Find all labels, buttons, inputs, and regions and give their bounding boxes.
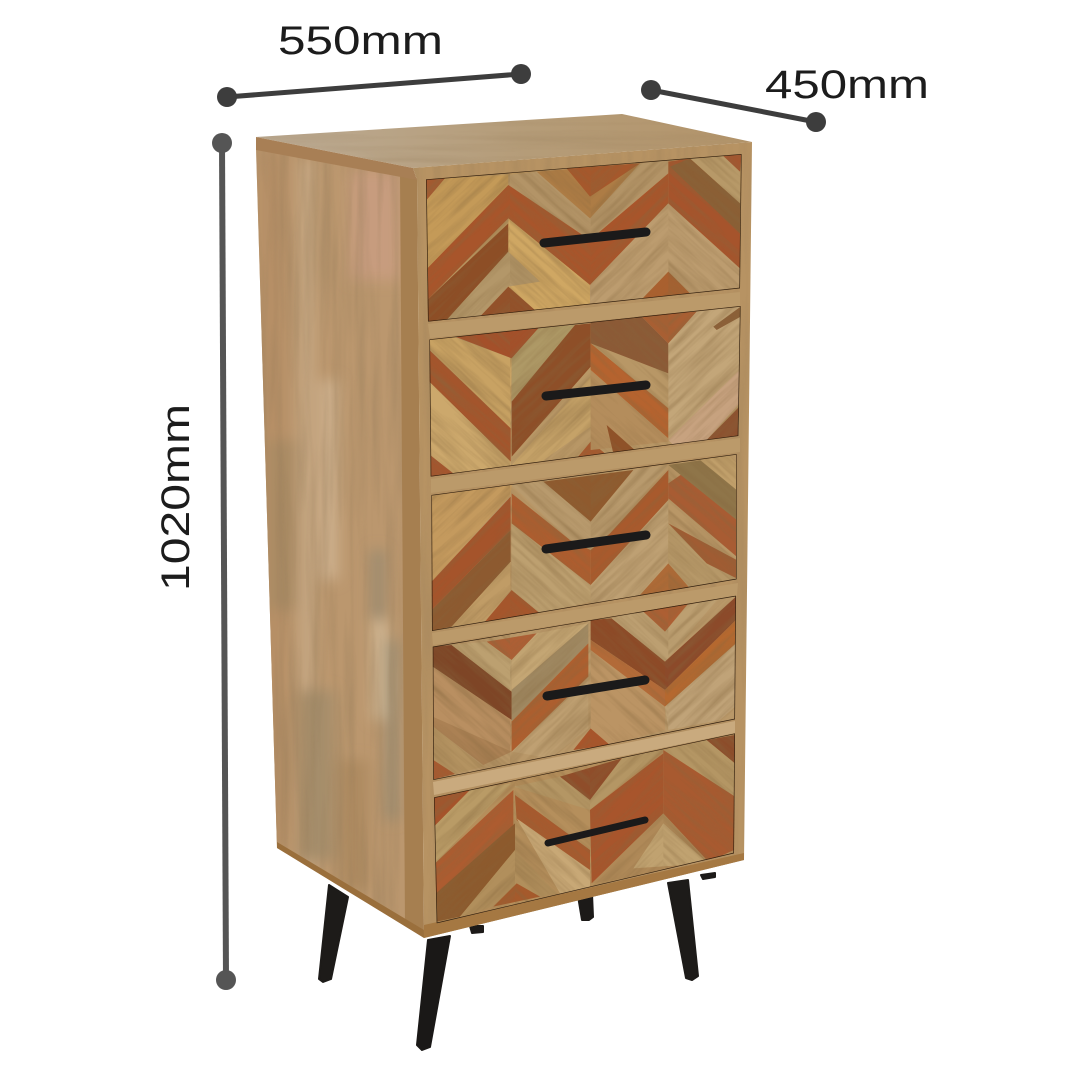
drawer 1 wood grain bbox=[427, 156, 740, 318]
back leg and far feet bbox=[470, 873, 715, 933]
drawer 4 bbox=[432, 596, 736, 780]
handle 3 bbox=[546, 535, 646, 549]
top surface bbox=[256, 114, 752, 168]
width label: 550mm bbox=[278, 19, 443, 63]
top edge band on side bbox=[256, 137, 417, 180]
drawer handles bbox=[544, 232, 646, 843]
infographic canvas bbox=[161, 26, 926, 1051]
depth dimension arrow bbox=[641, 80, 826, 132]
height label: 1020mm bbox=[154, 404, 198, 591]
width dimension arrow bbox=[217, 64, 531, 107]
drawer 1 outline bbox=[426, 154, 742, 322]
drawer 4 outline bbox=[433, 596, 736, 780]
side panel bbox=[256, 150, 424, 938]
right front leg bbox=[668, 880, 698, 980]
shelf rails between drawers bbox=[428, 292, 740, 795]
left front leg bbox=[319, 885, 348, 982]
centre front leg bbox=[417, 936, 450, 1050]
drawer 5 outline bbox=[434, 733, 735, 923]
depth label: 450mm bbox=[765, 63, 929, 107]
drawer 2 bbox=[429, 306, 741, 476]
drawer 1 bbox=[426, 154, 742, 322]
handle 5 bbox=[548, 820, 645, 843]
drawer 3 outline bbox=[431, 454, 737, 631]
front frame bbox=[410, 140, 755, 940]
cabinet body bbox=[250, 110, 760, 950]
drawer 3 bbox=[431, 454, 737, 631]
drawer 5 wood grain bbox=[435, 734, 734, 922]
handle 1 bbox=[544, 232, 646, 243]
handle 2 bbox=[546, 385, 646, 396]
drawer 2 outline bbox=[429, 306, 741, 477]
drawer 5 bbox=[434, 734, 735, 924]
height dimension arrow bbox=[212, 133, 236, 990]
drawer 4 wood grain bbox=[434, 601, 735, 777]
handle 4 bbox=[547, 680, 645, 696]
drawer 2 wood grain bbox=[430, 307, 740, 473]
drawer 3 wood grain bbox=[432, 456, 736, 626]
